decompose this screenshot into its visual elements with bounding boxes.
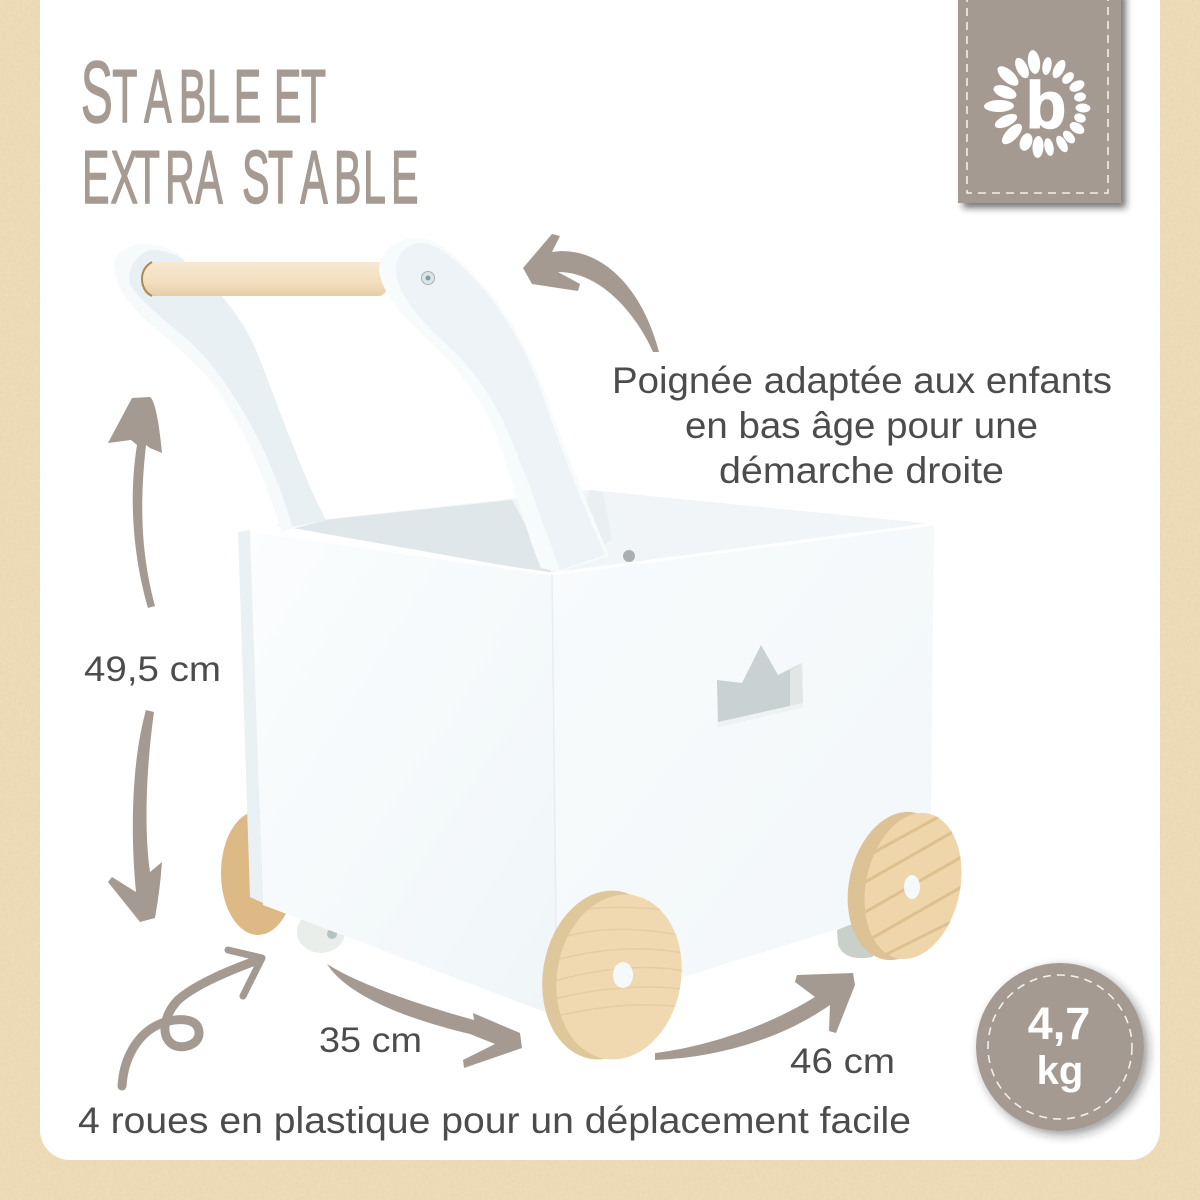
logo letter: b <box>1026 68 1066 142</box>
width label: 46 cm <box>790 1042 895 1081</box>
title: TABLE ET <box>112 54 326 138</box>
right handle arm <box>379 238 609 572</box>
handle caption <box>612 360 1112 491</box>
rear caster <box>297 911 345 953</box>
box left face <box>250 530 557 1015</box>
box left strip <box>238 530 263 903</box>
arrow: height down <box>108 710 162 922</box>
front wheel <box>542 890 682 1060</box>
depth label: 35 cm <box>319 1021 422 1060</box>
handle screw <box>422 272 434 284</box>
right wheel <box>848 812 962 960</box>
arrow: width <box>655 973 855 1060</box>
height label: 49,5 cm <box>84 650 221 689</box>
arrow: depth <box>327 964 522 1068</box>
arrow: handle <box>523 234 659 352</box>
icon: flower petals <box>984 49 1091 158</box>
box interior <box>276 490 934 574</box>
bottom screw <box>623 550 635 562</box>
arrow: height up <box>108 397 162 608</box>
logo tag <box>958 0 1121 203</box>
weight badge: kg <box>1037 1049 1083 1093</box>
front-right caster <box>837 915 873 958</box>
product: wooden walker cart <box>114 238 974 1070</box>
left handle arm <box>114 244 326 532</box>
weight badge <box>976 963 1144 1131</box>
handle caption: démarche droite <box>719 450 1004 491</box>
box right face <box>552 524 934 1015</box>
title: EXTRA STABLE <box>82 135 419 219</box>
arrow: loop to rear wheel <box>122 950 262 1086</box>
title: S <box>81 43 113 141</box>
wooden handle bar <box>142 262 387 296</box>
title <box>81 43 419 219</box>
handle caption: Poignée adaptée aux enfants <box>612 360 1112 401</box>
wheels caption: 4 roues en plastique pour un déplacement facile <box>78 1100 911 1141</box>
rear wheel <box>221 811 295 935</box>
crown cutout <box>717 645 803 727</box>
weight badge: 4,7 <box>1028 998 1090 1049</box>
handle caption: en bas âge pour une <box>685 405 1038 446</box>
